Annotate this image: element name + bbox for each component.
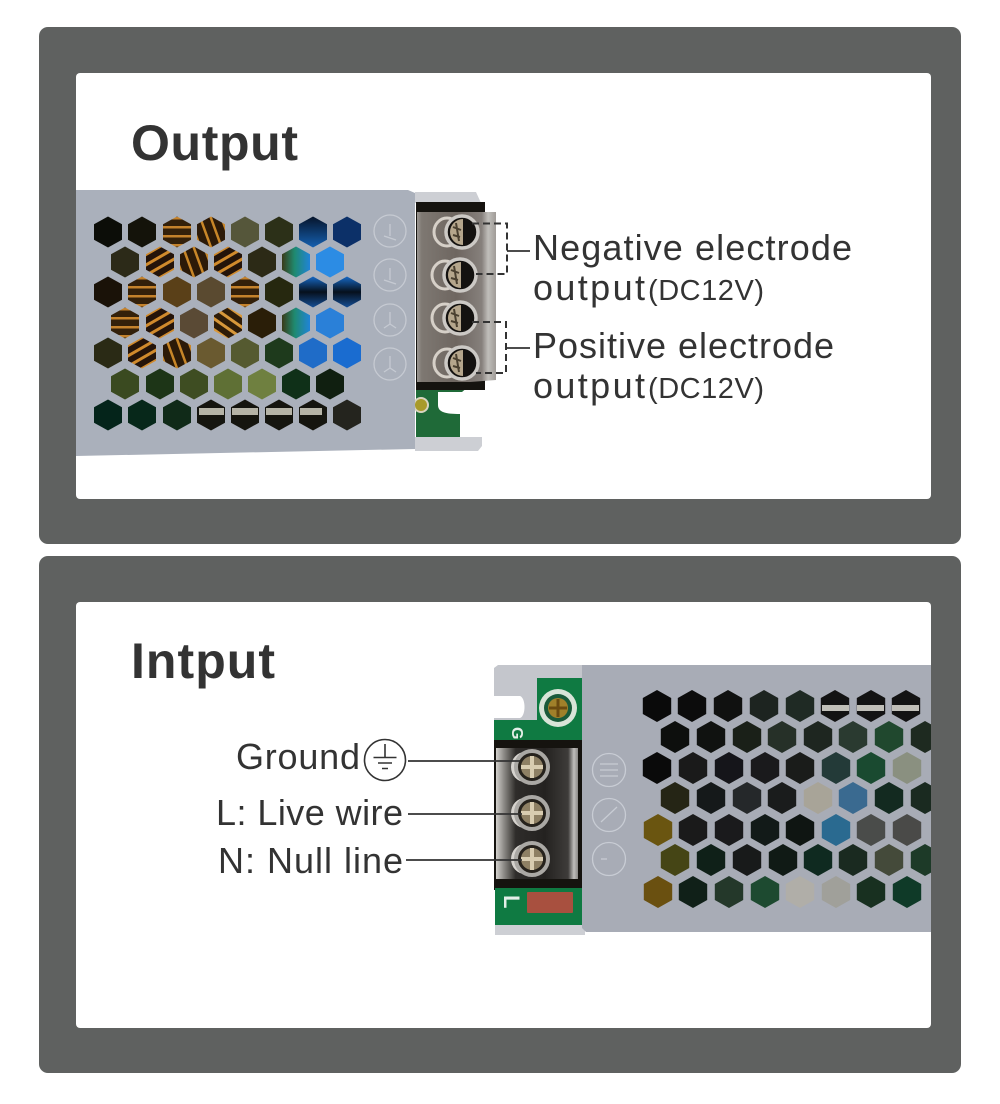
circuit board top bbox=[494, 678, 582, 745]
label: live wire: L: Live wire bbox=[216, 792, 403, 833]
embossed chassis symbols bbox=[374, 215, 406, 380]
panel: input white card bbox=[76, 602, 931, 1028]
label: positive electrode output: (DC12V) bbox=[648, 373, 764, 405]
board marking G: G bbox=[508, 727, 525, 739]
metal chassis bbox=[76, 190, 415, 456]
metal chassis bbox=[582, 665, 940, 932]
label: positive electrode output bbox=[533, 325, 834, 406]
embossed chassis symbols bbox=[592, 754, 626, 876]
board marking L: L bbox=[499, 895, 524, 908]
icon: ground symbol bbox=[364, 740, 406, 780]
black terminal base bbox=[416, 202, 485, 390]
terminal screws bbox=[511, 751, 548, 875]
lower board bbox=[495, 888, 582, 925]
leader line: live wire bbox=[408, 813, 522, 815]
terminal screws bbox=[432, 216, 478, 379]
panel: output frame bbox=[39, 27, 961, 544]
terminal base bbox=[494, 740, 582, 890]
board screw bbox=[539, 689, 577, 727]
red fuse switch bbox=[527, 892, 573, 913]
bottom rail bbox=[495, 924, 585, 935]
leader line: null line bbox=[406, 859, 522, 861]
label: ground: Ground bbox=[236, 736, 360, 777]
hexagon vents bbox=[643, 690, 939, 908]
dashed brackets: output terminals bbox=[472, 224, 530, 373]
hexagon vents bbox=[94, 216, 361, 430]
leader line: ground bbox=[408, 760, 520, 762]
label: null line: N: Null line bbox=[218, 840, 403, 881]
terminal block cover bbox=[417, 212, 496, 382]
panel: output white card bbox=[76, 73, 931, 499]
mounting bracket bbox=[494, 665, 582, 720]
label: negative electrode output: output bbox=[533, 267, 645, 308]
label: positive electrode output: output bbox=[533, 365, 645, 406]
heading: Intput: Intput bbox=[131, 633, 275, 689]
label: negative electrode output: Negative electrode bbox=[533, 227, 852, 268]
top and bottom rails bbox=[415, 192, 482, 451]
mounting screw bbox=[414, 398, 428, 412]
label: negative electrode output bbox=[533, 227, 852, 308]
power supply photo: output end bbox=[76, 190, 496, 456]
label: positive electrode output: Positive electrode bbox=[533, 325, 834, 366]
panel: input frame bbox=[39, 556, 961, 1073]
power supply photo: input end bbox=[494, 665, 940, 935]
heading: Output: Output bbox=[131, 115, 298, 171]
terminal cover bbox=[496, 748, 578, 879]
label: negative electrode output: (DC12V) bbox=[648, 275, 764, 307]
silver component seen through vents bbox=[199, 408, 322, 415]
circuit board with notch bbox=[416, 382, 474, 437]
silver component seen through vents bbox=[822, 705, 919, 711]
